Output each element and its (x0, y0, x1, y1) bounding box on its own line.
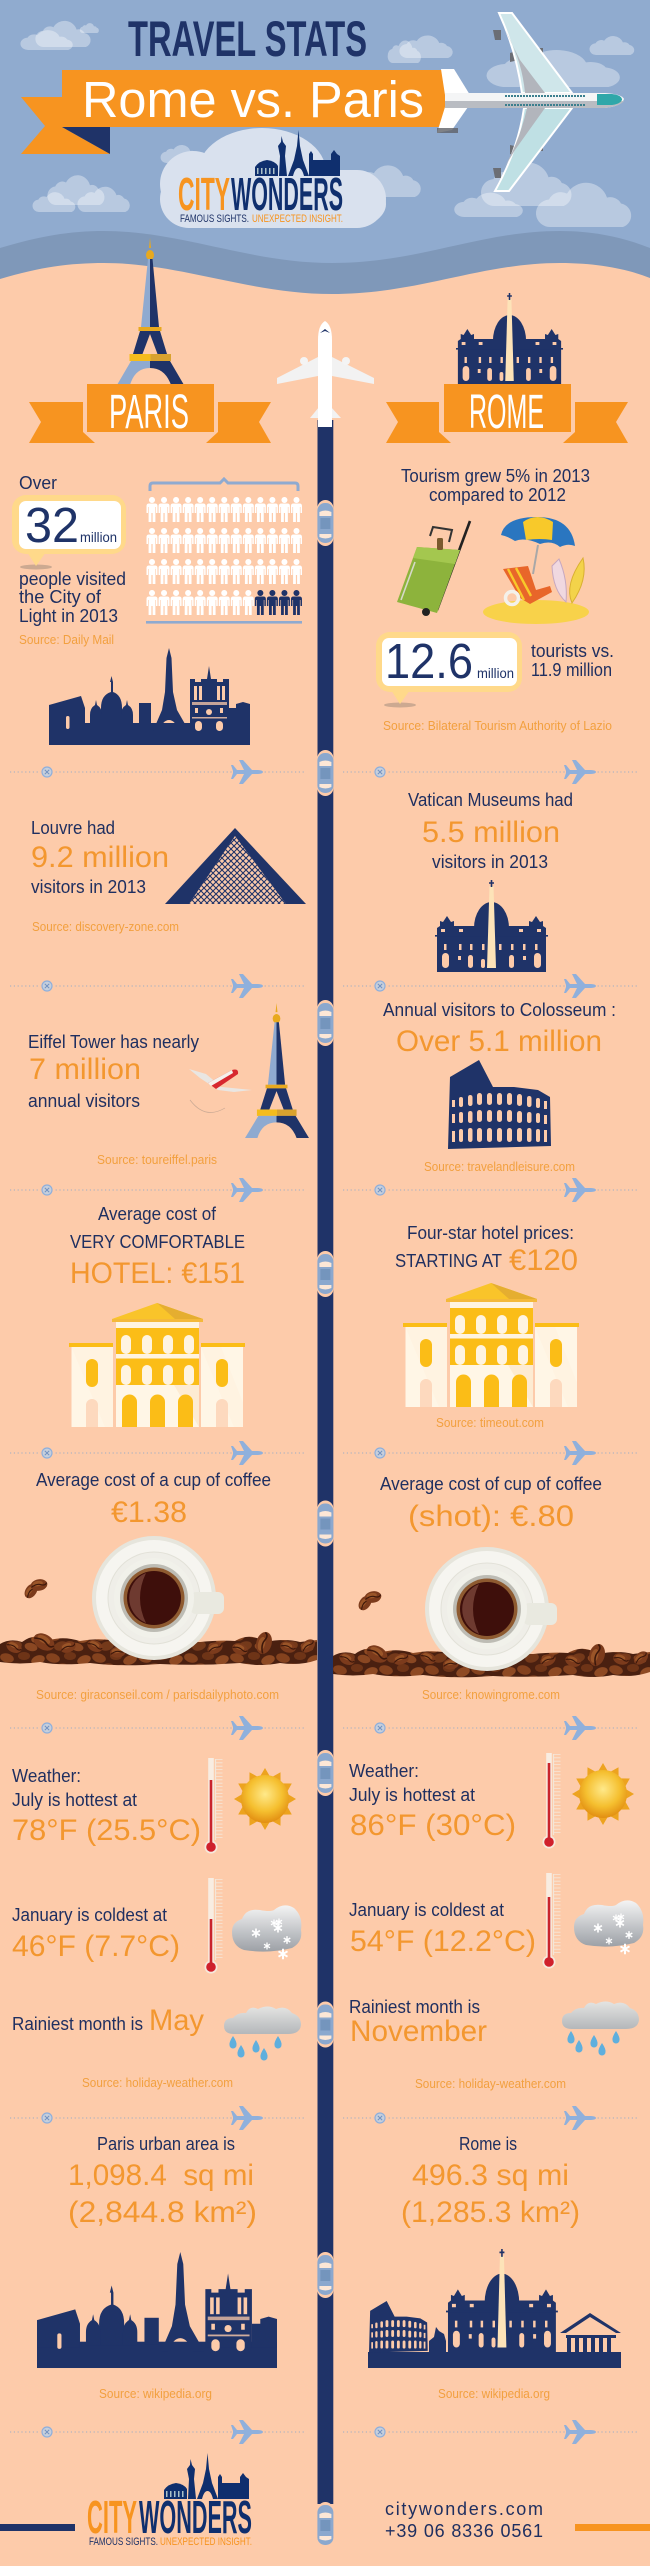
stat: hotel price: €120 (509, 1244, 578, 1277)
text: tourism grew: Tourism grew 5% in 2013 (401, 466, 590, 486)
text: four-star: Four-star hotel prices: (407, 1223, 574, 1243)
logo tagline accent: UNEXPECTED INSIGHT. (160, 2536, 252, 2548)
stat: 7 million: 7 million (29, 1053, 141, 1086)
icon: snow cloud (232, 1905, 301, 1959)
source: Source: wikipedia.org (438, 2387, 550, 2401)
logo skyline (164, 2453, 249, 2499)
coffee beans strip (0, 1630, 318, 1665)
text: rome is: Rome is (459, 2134, 517, 2154)
text: rainiest: Rainiest month is (12, 2014, 143, 2034)
stat: january temperature: 46°F (7.7°C) (12, 1930, 180, 1963)
source: Source: travelandleisure.com (424, 1160, 575, 1174)
logo tagline: FAMOUS SIGHTS. (89, 2536, 158, 2548)
text: july: July is hottest at (349, 1785, 475, 1805)
text: visitors: visitors in 2013 (432, 852, 548, 872)
header sky panel (0, 0, 650, 330)
icon: suitcase (397, 521, 470, 616)
icon: louvre pyramid (165, 828, 306, 904)
text: eiffel tower: Eiffel Tower has nearly (28, 1032, 199, 1052)
source: Source: holiday-weather.com (82, 2076, 233, 2090)
panel: paris weather (12, 1758, 301, 2090)
icon: coffee bean (356, 1590, 382, 1613)
icon: small red plane (189, 1069, 252, 1112)
stat: november: November (350, 2015, 487, 2048)
title: TRAVEL STATS (128, 11, 367, 67)
source: Source: discovery-zone.com (32, 920, 179, 934)
title banner (21, 70, 445, 154)
icon: hotel (403, 1283, 579, 1407)
text: january: January is coldest at (349, 1900, 504, 1920)
panel: rome tourism (376, 466, 614, 733)
icon: coffee bean (22, 1578, 48, 1601)
stat: coffee price: €1.38 (111, 1496, 187, 1529)
text: tourists vs: tourists vs. (531, 641, 614, 661)
source: Source: Bilateral Tourism Authority of Lazio (383, 719, 612, 733)
stat: square kilometres: (2,844.8 km²) (68, 2196, 257, 2229)
text: light in 2013: Light in 2013 (19, 606, 118, 626)
text: january: January is coldest at (12, 1905, 167, 1925)
icon: eiffel tower (245, 1003, 309, 1138)
text: average cost of coffee: Average cost of cup of coffee (380, 1474, 602, 1494)
icon: hotel (69, 1303, 245, 1427)
text: people visited: people visited (19, 569, 126, 589)
source: Source: Daily Mail (19, 633, 114, 647)
text: average cost of coffee: Average cost of a cup of coffee (36, 1470, 271, 1490)
panel: paris hotel (69, 1204, 245, 1427)
text: annual visitors: annual visitors (28, 1091, 140, 1111)
icon: white plane on road (277, 321, 374, 427)
source: Source: toureiffel.paris (97, 1153, 217, 1167)
callout: 32 million: million (80, 529, 117, 545)
panel: rome coffee (333, 1474, 650, 1702)
coffee beans strip (333, 1642, 650, 1677)
icon: snow cloud (574, 1900, 643, 1954)
website: citywonders.com (385, 2499, 543, 2519)
paris ribbon: PARIS (109, 386, 189, 439)
panel: rome area (368, 2134, 621, 2401)
phone: +39 06 8336 0561 (385, 2521, 543, 2541)
icon: thermometer hot (204, 1758, 219, 1854)
center cloud behind logo (160, 128, 386, 228)
icon: rain cloud (562, 2002, 639, 2056)
clouds (20, 21, 634, 227)
stat: january temperature: 54°F (12.2°C) (350, 1925, 536, 1958)
people pictogram (146, 479, 302, 624)
text: louvre had: Louvre had (31, 818, 115, 838)
rome ribbon: ROME (469, 386, 544, 439)
stat: coffee price: (shot): €.80 (408, 1500, 574, 1533)
logo skyline (255, 130, 340, 176)
text: visitors: visitors in 2013 (31, 877, 146, 897)
icon: coffee cup (425, 1547, 557, 1671)
logo tagline accent: UNEXPECTED INSIGHT. (252, 213, 343, 225)
panel: paris visitors (12, 473, 302, 745)
road (318, 420, 333, 2504)
source: Source: holiday-weather.com (415, 2077, 566, 2091)
icon: thermometer hot (542, 1753, 557, 1848)
icon: st peter's header (456, 293, 563, 385)
text: annual visitors: Annual visitors to Colosseum : (383, 1000, 616, 1020)
text: rainiest: Rainiest month is (349, 1997, 480, 2017)
right rule (575, 2524, 650, 2531)
text: WONDERS (231, 168, 343, 220)
stat: 9.2 million: 9.2 million (31, 841, 169, 874)
icon: colosseum (448, 1060, 551, 1149)
panel: louvre (31, 818, 306, 934)
left rule (0, 2524, 75, 2531)
icon: eiffel tower header (117, 238, 184, 385)
panel: paris coffee (0, 1470, 318, 1702)
panel: rome weather (349, 1753, 643, 2091)
callout: 12.6 million (376, 632, 522, 708)
paris skyline (37, 2252, 277, 2368)
stat: july temperature: 78°F (25.5°C) (12, 1814, 201, 1847)
stat: square kilometres: (1,285.3 km²) (401, 2196, 580, 2229)
stat: may: May (149, 2004, 204, 2037)
paris ribbon (29, 384, 271, 443)
stat: square miles: 496.3 sq mi (412, 2159, 569, 2192)
icon: beach umbrella and chair (483, 517, 589, 624)
panel: eiffel tower (28, 1003, 309, 1167)
stat: over 5.1 million: Over 5.1 million (396, 1025, 602, 1058)
stat: hotel price: HOTEL: €151 (70, 1257, 245, 1290)
source: Source: knowingrome.com (422, 1688, 560, 1702)
text: the city of: the City of (19, 587, 102, 607)
panel: rome hotel (395, 1223, 579, 1430)
rome ribbon (386, 384, 628, 443)
panel: colosseum (383, 1000, 616, 1174)
icon: thermometer cold (542, 1873, 557, 1968)
title banner: Rome vs. Paris (82, 71, 424, 128)
rome skyline (368, 2249, 621, 2368)
footer logo (0, 2453, 252, 2548)
callout: 32 million (12, 495, 126, 570)
text: over: Over (19, 473, 57, 493)
text: starting at: STARTING AT (395, 1251, 502, 1271)
callout: 12.6 million: million (477, 665, 514, 681)
icon: large airplane (437, 13, 624, 191)
text: WONDERS (139, 2491, 252, 2543)
dividers (10, 760, 638, 2444)
text: average cost: Average cost of (98, 1204, 217, 1224)
icon: st peter's (435, 880, 548, 972)
cars on the road (317, 500, 333, 2548)
paris skyline (49, 648, 250, 745)
source: Source: timeout.com (436, 1416, 544, 1430)
text: paris urban area: Paris urban area is (97, 2134, 235, 2154)
text: weather: Weather: (349, 1761, 419, 1781)
stat: square miles: 1,098.4 sq mi (68, 2159, 254, 2192)
top logo (178, 130, 343, 225)
text: july: July is hottest at (12, 1790, 137, 1810)
icon: coffee cup (92, 1536, 224, 1660)
text: 11.9 million: 11.9 million (531, 660, 612, 680)
text: very comfortable: VERY COMFORTABLE (70, 1232, 245, 1252)
icon: rain cloud (224, 2006, 301, 2060)
icon: sun (234, 1768, 296, 1830)
stat: 5.5 million: 5.5 million (422, 816, 560, 849)
footer logo: CITY (87, 2491, 137, 2543)
icon: thermometer cold (204, 1878, 219, 1974)
panel: paris area (37, 2134, 277, 2401)
icon: sun (572, 1763, 634, 1825)
footer contact (385, 2499, 650, 2541)
text: compared to 2012: compared to 2012 (429, 485, 566, 505)
stat: july temperature: 86°F (30°C) (350, 1809, 516, 1842)
callout: 32 million: 32 (25, 499, 79, 553)
source: Source: wikipedia.org (99, 2387, 212, 2401)
panel: vatican museums (408, 790, 573, 972)
text: weather: Weather: (12, 1766, 81, 1786)
source: Source: giraconseil.com / parisdailyphoto.com (36, 1688, 279, 1702)
logo tagline: FAMOUS SIGHTS. (180, 213, 249, 225)
text: vatican museums had: Vatican Museums had (408, 790, 573, 810)
top logo: CITY (178, 168, 230, 220)
callout: 12.6 million: 12.6 (385, 635, 473, 689)
